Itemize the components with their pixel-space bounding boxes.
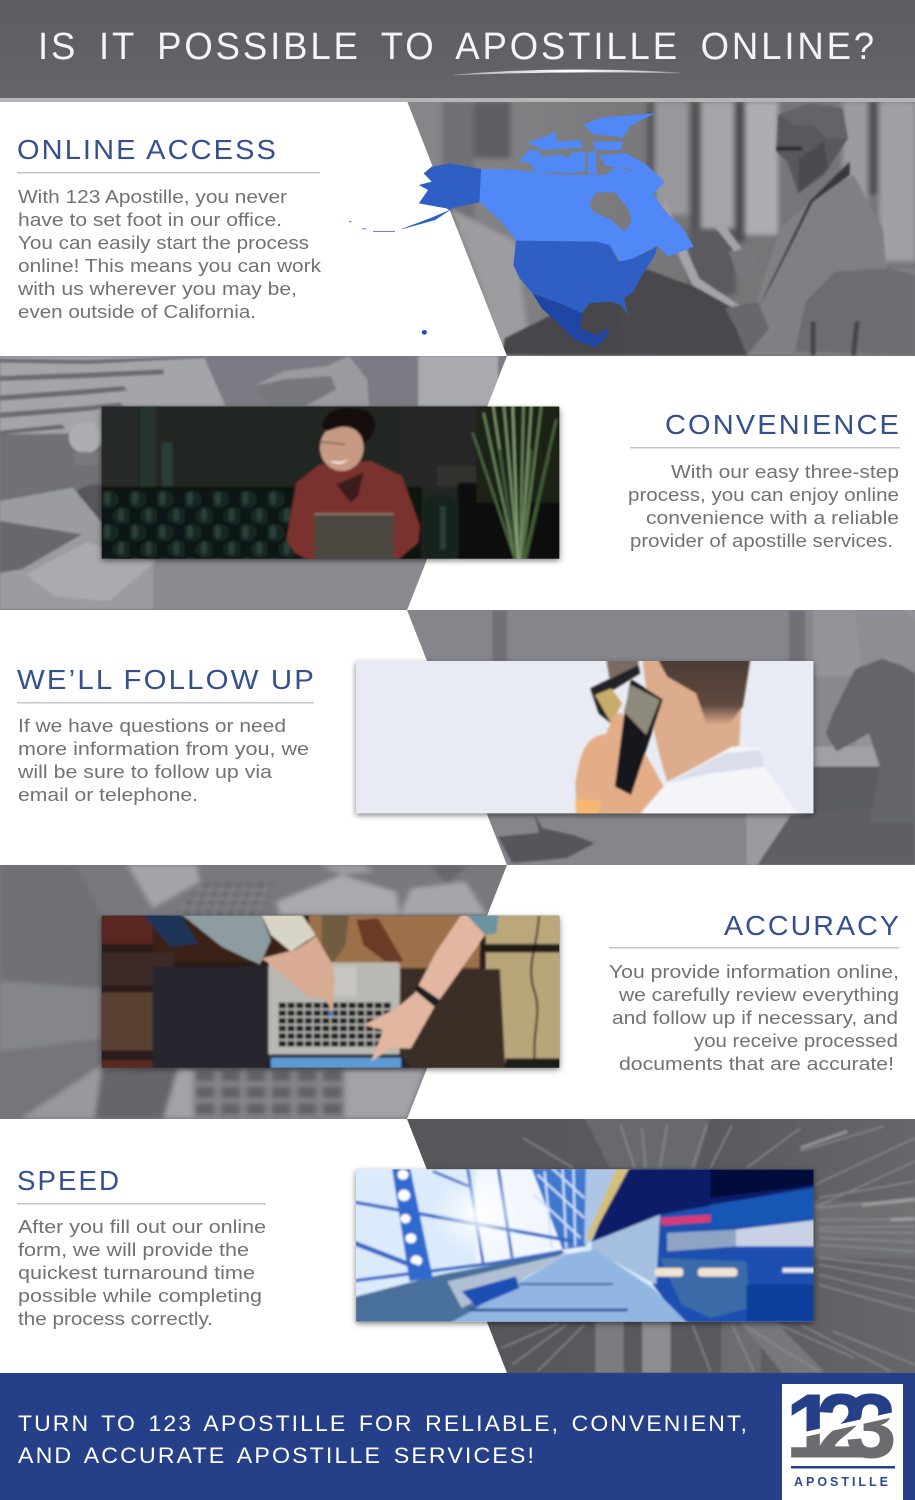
heading: we'll follow up: WE’LL FOLLOW UP xyxy=(17,664,316,695)
heading: accuracy: ACCURACY xyxy=(724,910,901,941)
text: convenience body: provider of apostille services. xyxy=(630,530,893,551)
text: convenience body: convenience with a reliable xyxy=(646,507,899,528)
logo: 123 Apostille: APOSTILLE xyxy=(794,1475,888,1489)
text: accuracy body: you receive processed xyxy=(694,1030,898,1051)
text: convenience body xyxy=(628,461,899,551)
logo: 123 Apostille: 123 xyxy=(786,1377,893,1477)
photo: woman at desk backdrop xyxy=(407,610,915,865)
text: we'll follow up body: will be sure to follow up via xyxy=(17,761,273,782)
heading: online access: ONLINE ACCESS xyxy=(17,134,278,165)
text: speed body: After you fill out our online xyxy=(18,1216,266,1237)
text: speed body xyxy=(18,1216,266,1329)
map: Canada xyxy=(479,113,694,262)
map: Alaska and Aleutians xyxy=(401,163,481,230)
heading: speed: SPEED xyxy=(17,1165,121,1196)
text: speed body: possible while completing xyxy=(18,1285,262,1306)
photo: laptops backdrop xyxy=(0,865,507,1119)
text: we'll follow up body: more information from you, we xyxy=(18,738,309,759)
text: speed body: form, we will provide the xyxy=(18,1239,249,1260)
panel: speed xyxy=(17,1118,915,1373)
text: convenience body: process, you can enjoy online xyxy=(628,484,899,505)
text: accuracy body xyxy=(609,961,899,1074)
footer band xyxy=(0,1373,915,1500)
map: North America xyxy=(349,113,694,347)
text: we'll follow up body: If we have questions or need xyxy=(18,715,286,736)
text: online access body: online! This means you can work xyxy=(18,255,322,276)
map: Hawaii xyxy=(422,330,427,335)
text: accuracy body: You provide information online, xyxy=(609,961,899,982)
footer call to action: TURN TO 123 APOSTILLE FOR RELIABLE, CONVENIENT, xyxy=(18,1411,749,1436)
text: convenience body: With our easy three-step xyxy=(671,461,899,482)
map: United States xyxy=(513,241,657,315)
text: accuracy body: we carefully review everything xyxy=(618,984,899,1005)
title underline swoosh xyxy=(453,70,680,75)
text: online access body: even outside of California. xyxy=(18,301,256,322)
text: online access body: have to set foot in our office. xyxy=(18,209,282,230)
footer call to action: AND ACCURATE APOSTILLE SERVICES! xyxy=(18,1443,536,1468)
map: Aleutian island dots xyxy=(349,221,395,232)
text: accuracy body: documents that are accurate! xyxy=(619,1053,894,1074)
text: online access body xyxy=(17,186,322,322)
image: woman on laptop on leather sofa xyxy=(98,404,564,565)
text: we'll follow up body xyxy=(17,715,309,805)
logo: 123 Apostille: 123 xyxy=(786,1377,893,1477)
text: speed body: the process correctly. xyxy=(18,1308,213,1329)
photo: blurred hands backdrop xyxy=(0,356,507,610)
text: online access body: with us wherever you may be, xyxy=(17,278,297,299)
footer call to action xyxy=(18,1411,749,1468)
title: IS IT POSSIBLE TO APOSTILLE ONLINE? xyxy=(38,26,877,68)
text: we'll follow up body: email or telephone. xyxy=(18,784,198,805)
image: subway platform with speeding train xyxy=(350,1165,819,1328)
photo: man with phone and map backdrop xyxy=(407,101,915,356)
panel: we'll follow up xyxy=(17,610,915,865)
map: Mexico xyxy=(533,293,610,347)
photo: light streaks backdrop xyxy=(407,1118,915,1373)
text: online access body: With 123 Apostille, you never xyxy=(18,186,287,207)
panel: online access xyxy=(17,101,915,356)
panel: accuracy xyxy=(0,865,901,1119)
text: accuracy body: and follow up if necessary, and xyxy=(612,1007,898,1028)
panel: convenience xyxy=(0,356,901,610)
logo: 123 Apostille xyxy=(782,1377,903,1500)
text: speed body: quickest turnaround time xyxy=(18,1262,255,1283)
heading: convenience: CONVENIENCE xyxy=(665,409,901,440)
image: man on phone xyxy=(356,657,813,823)
image: hands pointing at laptop xyxy=(98,912,565,1073)
text: online access body: You can easily start the process xyxy=(18,232,309,253)
header band xyxy=(0,0,915,102)
